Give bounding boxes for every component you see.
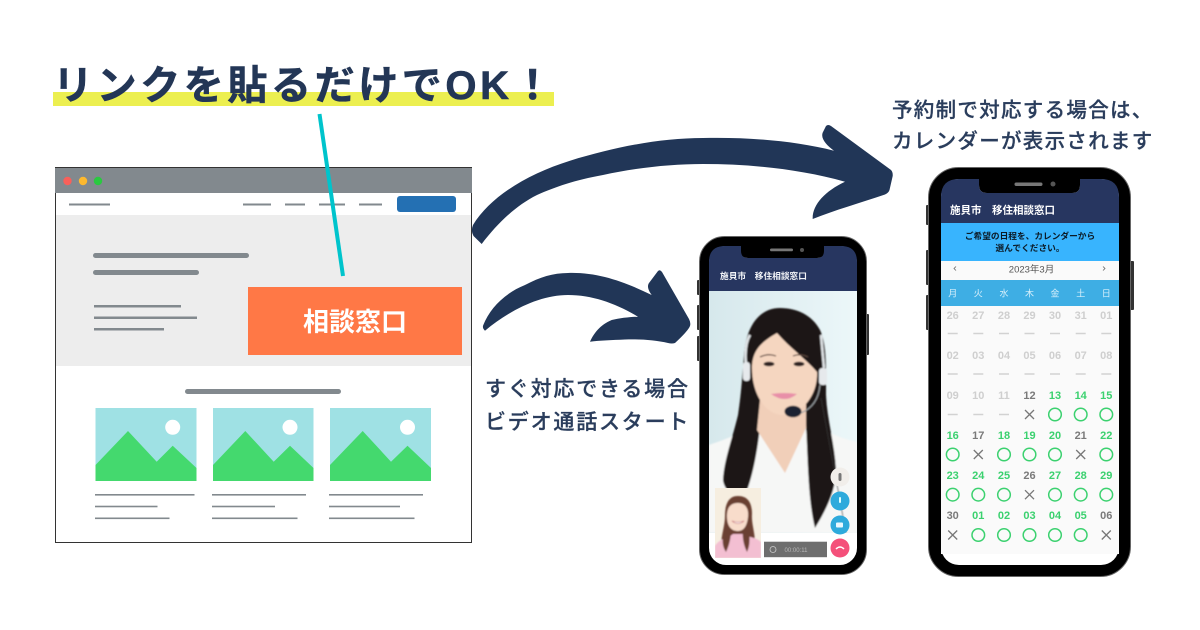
calendar week 6: 03 [1023,510,1036,522]
calendar week 4: 21 [1075,430,1087,442]
calendar week 4 [946,430,1113,461]
calendar week 2: 04 [998,350,1011,362]
calendar week 1: 29 [1023,310,1036,322]
calendar week 6: 05 [1075,510,1087,522]
calendar week 4: 16 [947,430,959,442]
phone side buttons [926,205,1134,330]
caption: immediate video call: すぐ対応できる場合 [485,378,690,401]
calendar week 2: 02 [947,350,959,362]
calendar week 3: 14 [1075,390,1088,402]
calendar week 1: 30 [1049,310,1061,322]
caption: immediate video call [485,378,690,434]
calendar week 5: 29 [1100,470,1112,482]
calendar week 1: 31 [1075,310,1087,322]
calendar week 5: 24 [972,470,985,482]
calendar week 2: 03 [972,350,984,362]
calendar week 2 [947,350,1112,374]
caption: reservation calendar: カレンダーが表示されます [892,130,1154,153]
phone: video call [697,236,869,574]
calendar week 1: 27 [972,310,984,322]
call control buttons [830,468,850,558]
calendar week 4: 19 [1023,430,1036,442]
caption: reservation calendar: 予約制で対応する場合は、 [892,99,1154,122]
weekday header: 火 [974,288,983,298]
headset [743,335,846,533]
calendar week 3: 13 [1049,390,1061,402]
phone side buttons [697,280,869,361]
calendar week 2: 08 [1100,350,1112,362]
video feed with operator [709,291,857,533]
white blouse [709,430,857,533]
app header: 施貝市 移住相談窓口 [950,204,1055,216]
arrow: to video phone [483,270,690,344]
calendar week 3: 10 [972,390,984,402]
instruction banner: ご希望の日程を、カレンダーから [965,230,1095,241]
notch [740,245,824,258]
weekday header: 水 [999,288,1009,298]
image card 3 [329,408,431,519]
instruction banner: 選んでください。 [995,242,1065,253]
calendar week 1: 01 [1100,310,1112,322]
app header [941,179,1119,223]
weekday header: 土 [1076,288,1085,298]
calendar week 5: 27 [1049,470,1061,482]
availability calendar grid [941,306,1119,554]
section heading bar [185,389,341,394]
weekday header: 木 [1025,288,1034,298]
calendar week 1 [947,310,1112,334]
calendar week 3 [947,390,1113,421]
calendar week 6: 02 [998,510,1010,522]
browser title bar [55,168,472,193]
smile [771,393,797,399]
calendar week 1: 28 [998,310,1010,322]
calendar week 1: 26 [947,310,959,322]
orange consultation button: 相談窓口 [303,307,407,337]
title: link paste headline: リンクを貼るだけでOK！ [53,64,556,108]
calendar week 5: 25 [998,470,1010,482]
calendar week 4: 20 [1049,430,1061,442]
calendar week 4: 22 [1100,430,1112,442]
calendar week 4: 18 [998,430,1010,442]
month selector [941,261,1119,280]
hero section [56,215,471,366]
app header: 施貝市 移住相談窓口 [720,270,807,281]
weekday header: 金 [1050,288,1060,298]
calendar week 2: 07 [1075,350,1087,362]
image card 1 [95,408,196,519]
browser mockup [55,168,472,542]
weekday header: 日 [1102,288,1111,298]
face [752,333,817,415]
calendar week 5: 23 [947,470,959,482]
month selector: 2023年3月 [1009,264,1054,276]
long hair [723,308,836,528]
phone: calendar booking [926,168,1134,576]
caption: reservation calendar [892,99,1154,153]
image card 2 [212,408,314,519]
calendar week 3: 09 [947,390,959,402]
calendar week 3: 11 [998,390,1010,402]
instruction banner [941,223,1119,261]
notch [979,178,1080,193]
calendar week 5: 28 [1075,470,1087,482]
calendar week 6: 01 [972,510,984,522]
call timer: 00:00:11 [785,548,808,554]
calendar week 2: 05 [1023,350,1036,362]
eyes and brows [760,355,808,366]
cyan pointer line [320,114,343,276]
calendar week 3: 12 [1023,390,1036,402]
neck and chest [757,400,806,473]
app header [709,246,857,291]
calendar week 6: 30 [947,510,959,522]
calendar week 6: 06 [1100,510,1112,522]
caption: immediate video call: ビデオ通話スタート [485,410,690,434]
calendar week 2: 06 [1049,350,1061,362]
caller inset photo [715,488,761,558]
call timer [764,542,827,557]
calendar week 4: 17 [972,430,984,442]
weekday header [941,280,1119,306]
arrow: to calendar phone [472,125,893,244]
weekday header: 月 [948,288,957,298]
site navigation [69,196,456,212]
calendar week 5 [946,470,1113,501]
calendar week 3: 15 [1100,390,1112,402]
calendar week 5: 26 [1023,470,1036,482]
calendar week 6 [947,510,1112,541]
calendar week 6: 04 [1049,510,1062,522]
orange consultation button [248,287,462,355]
